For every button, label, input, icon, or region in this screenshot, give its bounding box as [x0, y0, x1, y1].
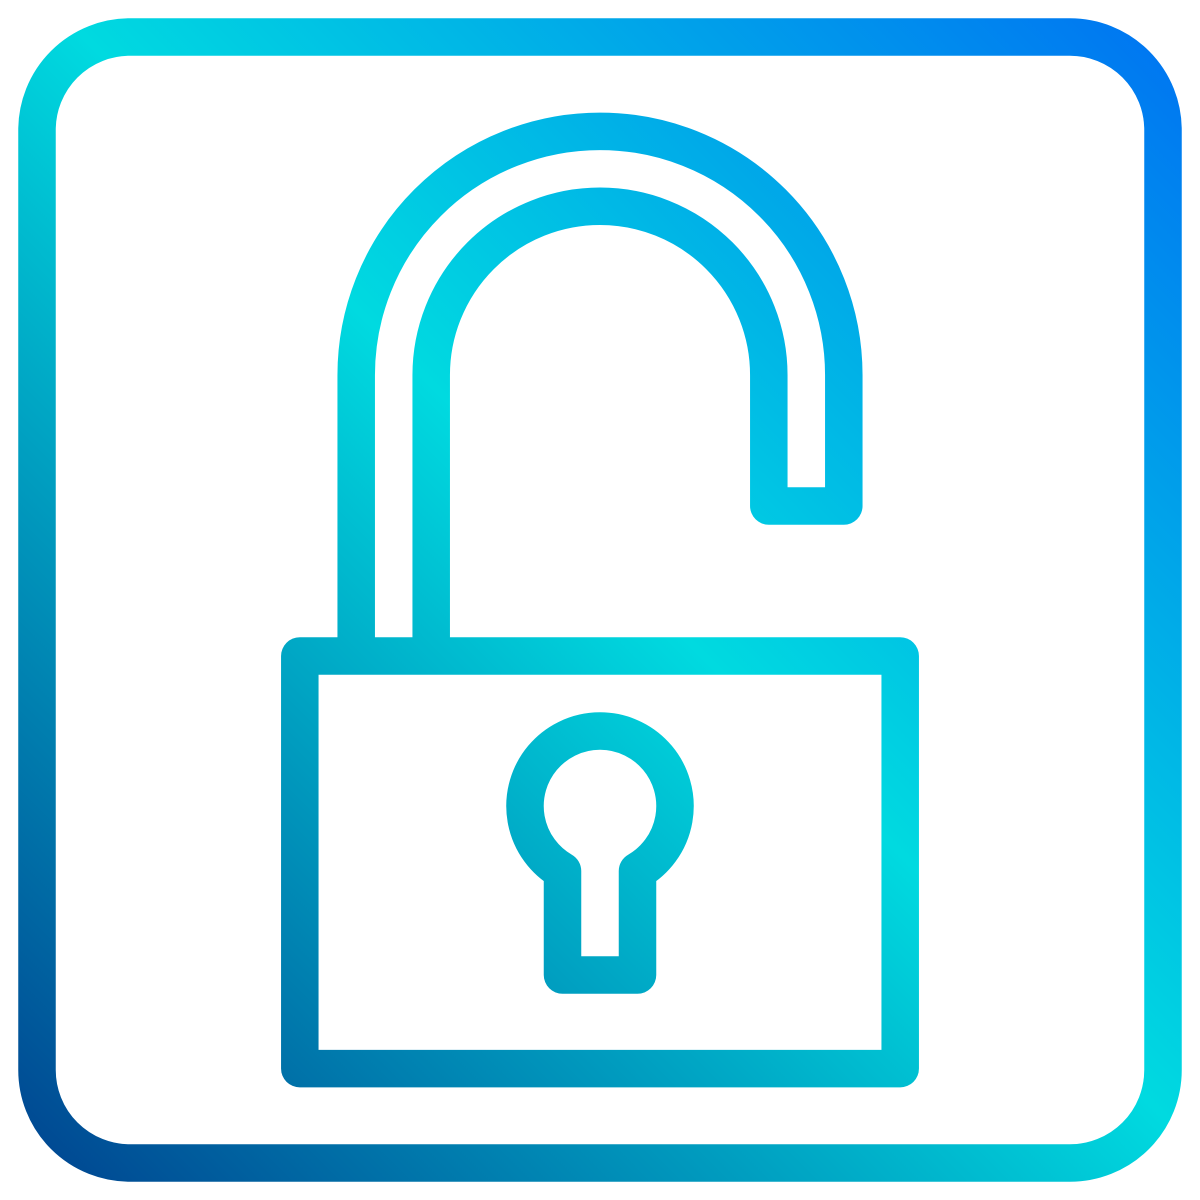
padlock body [300, 656, 900, 1069]
padlock shackle [356, 131, 844, 640]
keyhole [525, 731, 675, 975]
